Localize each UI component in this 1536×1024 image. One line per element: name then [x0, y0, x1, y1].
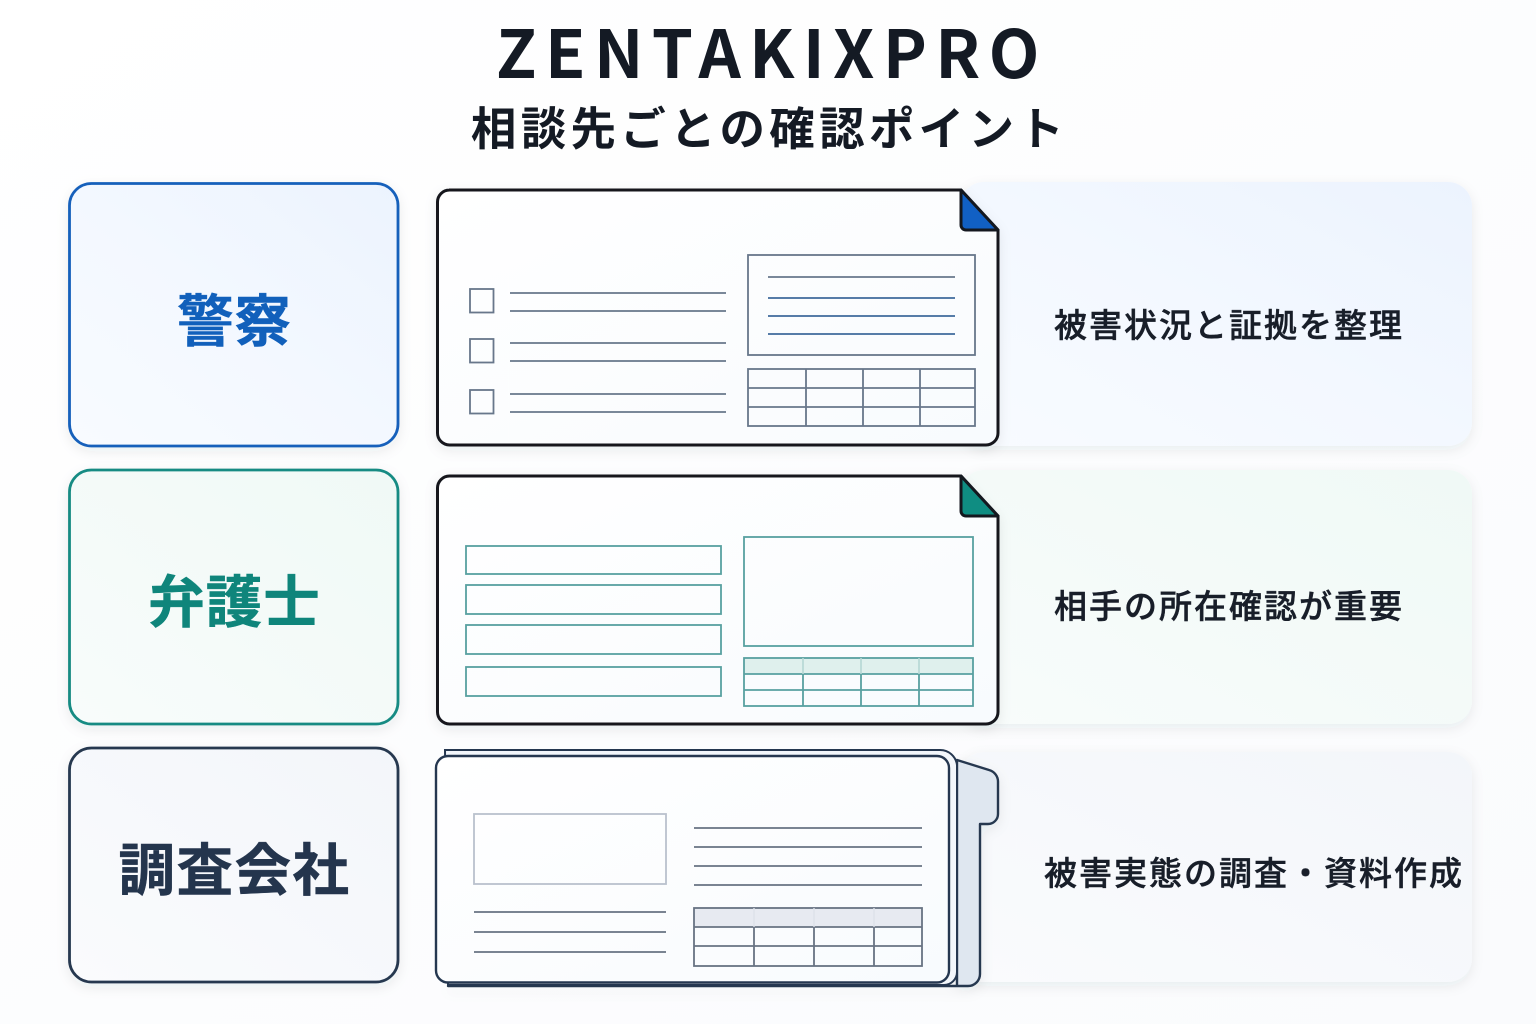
panel: lawyer label [70, 470, 398, 724]
panel: police label [70, 184, 398, 446]
front sheet [436, 756, 949, 982]
text lines right [694, 828, 922, 885]
panel: police description [960, 182, 1472, 446]
document: police form [438, 190, 998, 445]
heading: investigator: 調査会社 [118, 825, 350, 907]
icon: folded corner [961, 476, 998, 516]
heading: police: 警察 [177, 276, 292, 358]
panel: lawyer description [960, 470, 1472, 724]
checklist [470, 289, 726, 414]
image box [474, 814, 666, 884]
text: police description: 被害状況と証拠を整理 [1054, 299, 1404, 347]
large box [744, 537, 973, 646]
icon: folded corner [961, 190, 998, 230]
document: lawyer form [438, 476, 998, 724]
table [694, 908, 922, 966]
row: investigator [70, 748, 1472, 986]
text: lawyer description: 相手の所在確認が重要 [1054, 580, 1404, 628]
folder back with tab [448, 760, 998, 986]
title: ZENTAKIXPRO [496, 2, 1048, 98]
middle sheet [445, 750, 957, 985]
note box [748, 255, 975, 355]
row: police [70, 182, 1472, 446]
table [744, 658, 973, 706]
document: report folder [436, 750, 998, 986]
form fields [466, 546, 721, 696]
row: lawyer [70, 470, 1472, 724]
text lines left [474, 912, 666, 952]
panel: investigator description [960, 752, 1472, 982]
table [748, 369, 975, 426]
panel: investigator label [70, 748, 398, 982]
text: investigator description: 被害実態の調査・資料作成 [1044, 847, 1464, 895]
heading: lawyer: 弁護士 [148, 557, 321, 639]
subtitle: 相談先ごとの確認ポイント [471, 93, 1068, 159]
